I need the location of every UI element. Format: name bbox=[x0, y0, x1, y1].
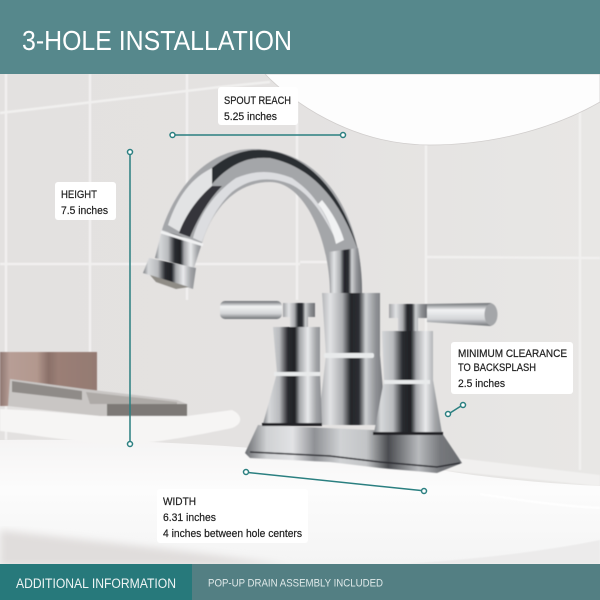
silver bar right bbox=[86, 392, 177, 404]
central column bbox=[318, 293, 386, 425]
collar ring bbox=[161, 232, 203, 245]
callout: spout reach bbox=[218, 87, 298, 125]
aerator nozzle bbox=[143, 258, 196, 289]
backsplash ledge bbox=[440, 456, 600, 486]
counter highlight bbox=[480, 494, 600, 508]
left handle lever bbox=[220, 301, 282, 319]
right handle hub bbox=[389, 304, 427, 331]
spout inner shine bbox=[193, 172, 336, 242]
spout left dark band bbox=[179, 186, 222, 237]
right lever end cap bbox=[484, 304, 498, 326]
dimension line: height bbox=[128, 150, 132, 446]
dimension line: spout reach bbox=[170, 132, 346, 138]
callout: spout reach: SPOUT REACH bbox=[224, 95, 291, 107]
base bbox=[245, 425, 462, 473]
callout: width: WIDTH bbox=[163, 496, 196, 508]
dimension line: backsplash clearance bbox=[446, 402, 466, 416]
callout: minimum clearance bbox=[451, 342, 573, 394]
right band bbox=[384, 380, 430, 384]
base lip bbox=[250, 452, 460, 467]
callout: height bbox=[55, 182, 116, 220]
left handle body bbox=[263, 327, 322, 424]
footer note: POP-UP DRAIN ASSEMBLY INCLUDED bbox=[208, 578, 383, 590]
left band bbox=[274, 372, 320, 376]
callout: minimum clearance: MINIMUM CLEARANCE bbox=[458, 348, 567, 360]
callout: width: 4 inches between hole centers bbox=[163, 528, 302, 540]
callout: minimum clearance: TO BACKSPLASH bbox=[458, 362, 536, 374]
white dish bbox=[0, 409, 240, 445]
clear bar bbox=[8, 379, 187, 416]
copper box bbox=[0, 352, 97, 406]
dark bar end bbox=[107, 404, 187, 416]
right handle lever bbox=[427, 303, 497, 326]
soap dish with items bbox=[0, 352, 240, 445]
silver bar top bbox=[12, 381, 82, 400]
counter top bbox=[0, 440, 600, 564]
footer left section bbox=[0, 564, 192, 600]
spout left shine bbox=[168, 168, 212, 232]
footer heading: ADDITIONAL INFORMATION bbox=[16, 576, 176, 591]
callout: minimum clearance: 2.5 inches bbox=[458, 378, 505, 390]
aerator collar bbox=[155, 230, 202, 268]
left handle hub bbox=[283, 303, 315, 328]
spout outer dark reflection bbox=[212, 150, 358, 250]
spout throat bbox=[328, 248, 362, 295]
footer right section bbox=[192, 564, 600, 600]
header band bbox=[0, 0, 600, 74]
right body base ring bbox=[373, 432, 443, 435]
spout arch base bbox=[162, 149, 362, 295]
counter shadow left bbox=[0, 530, 290, 566]
callout: width: 6.31 inches bbox=[163, 512, 216, 524]
faucet bbox=[143, 149, 498, 473]
title: 3-HOLE INSTALLATION bbox=[22, 25, 292, 56]
spout right highlight bbox=[318, 200, 344, 244]
callout: spout reach: 5.25 inches bbox=[224, 111, 277, 123]
aerator opening bbox=[150, 275, 189, 289]
column band bbox=[324, 353, 374, 358]
counter shadow right bbox=[400, 540, 600, 564]
callout: width bbox=[157, 489, 308, 543]
mirror bbox=[265, 74, 600, 145]
right handle body bbox=[374, 331, 442, 433]
footer band bbox=[0, 564, 600, 600]
dimension line: width bbox=[244, 470, 426, 494]
left body base ring bbox=[262, 423, 322, 426]
callout: height: HEIGHT bbox=[61, 189, 97, 201]
callout: height: 7.5 inches bbox=[61, 205, 108, 217]
